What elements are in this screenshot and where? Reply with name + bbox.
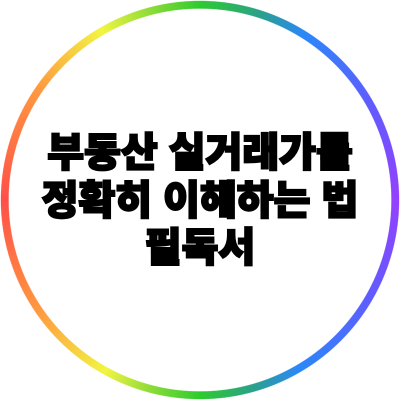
title: 부동산 실거래가를 [47, 131, 353, 175]
title: 정확히 이해하는 법 [42, 178, 358, 222]
title: 필독서 [145, 226, 255, 270]
title [41, 131, 358, 270]
